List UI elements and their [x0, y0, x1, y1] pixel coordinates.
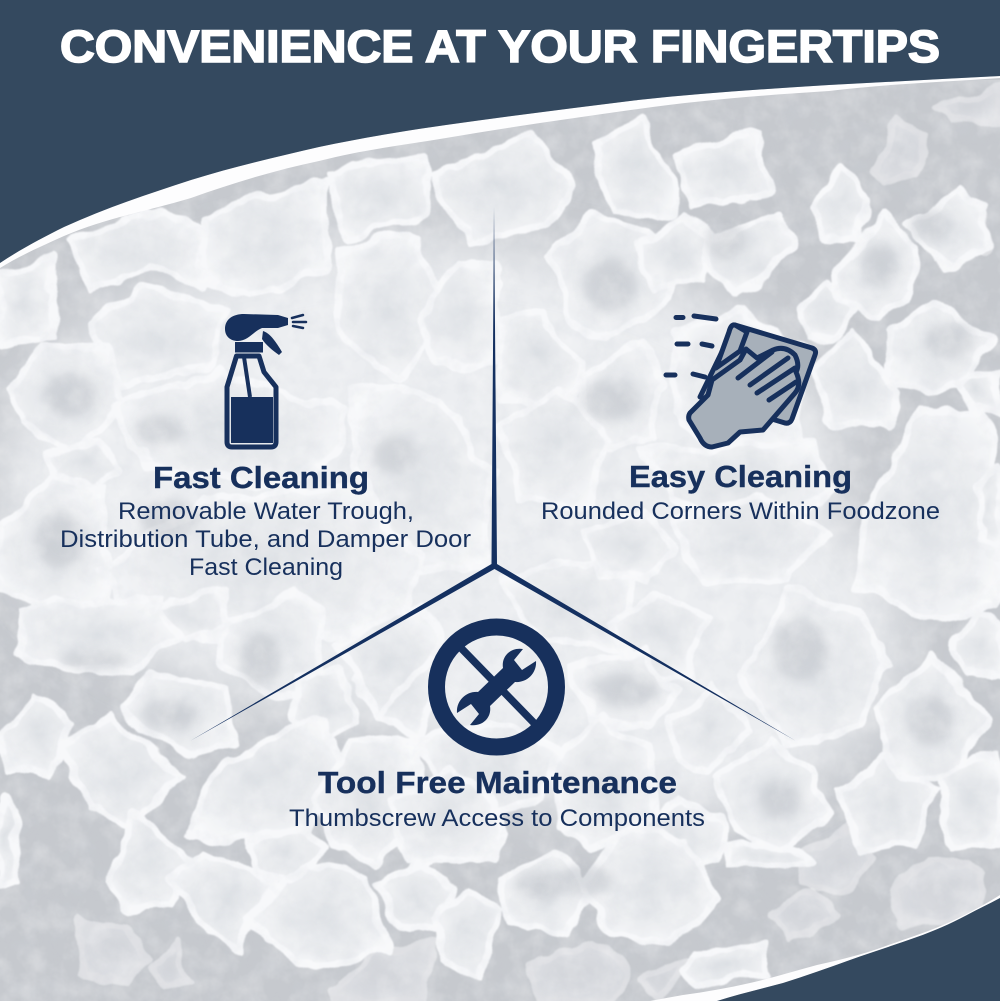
text: fast cleaning description	[60, 498, 471, 581]
text: easy cleaning description: Rounded Corners Within Foodzone	[541, 498, 940, 525]
heading: easy cleaning: Easy Cleaning	[629, 459, 852, 494]
header band: navy swoosh	[0, 0, 1000, 268]
footer band: navy swoosh	[650, 895, 1000, 1001]
panel: easy cleaning	[541, 316, 940, 525]
icon: spray bottle	[225, 314, 306, 447]
heading: fast cleaning: Fast Cleaning	[153, 460, 369, 495]
text: fast cleaning description: Distribution Tube, and Damper Door	[60, 526, 471, 553]
text: tool free maintenance description: Thumbscrew Access to Components	[289, 805, 705, 832]
text: fast cleaning description: Removable Water Trough,	[118, 498, 414, 525]
text: fast cleaning description: Fast Cleaning	[189, 554, 343, 581]
icon: crossed-out wrench	[436, 627, 556, 747]
panel: tool free maintenance	[289, 627, 705, 832]
divider: three-armed tapered lines	[190, 207, 796, 741]
panel: fast cleaning	[60, 314, 471, 581]
heading: tool free maintenance: Tool Free Maintenance	[318, 765, 677, 800]
title: CONVENIENCE AT YOUR FINGERTIPS	[60, 21, 940, 72]
icon: hand wiping with cloth	[666, 316, 816, 447]
